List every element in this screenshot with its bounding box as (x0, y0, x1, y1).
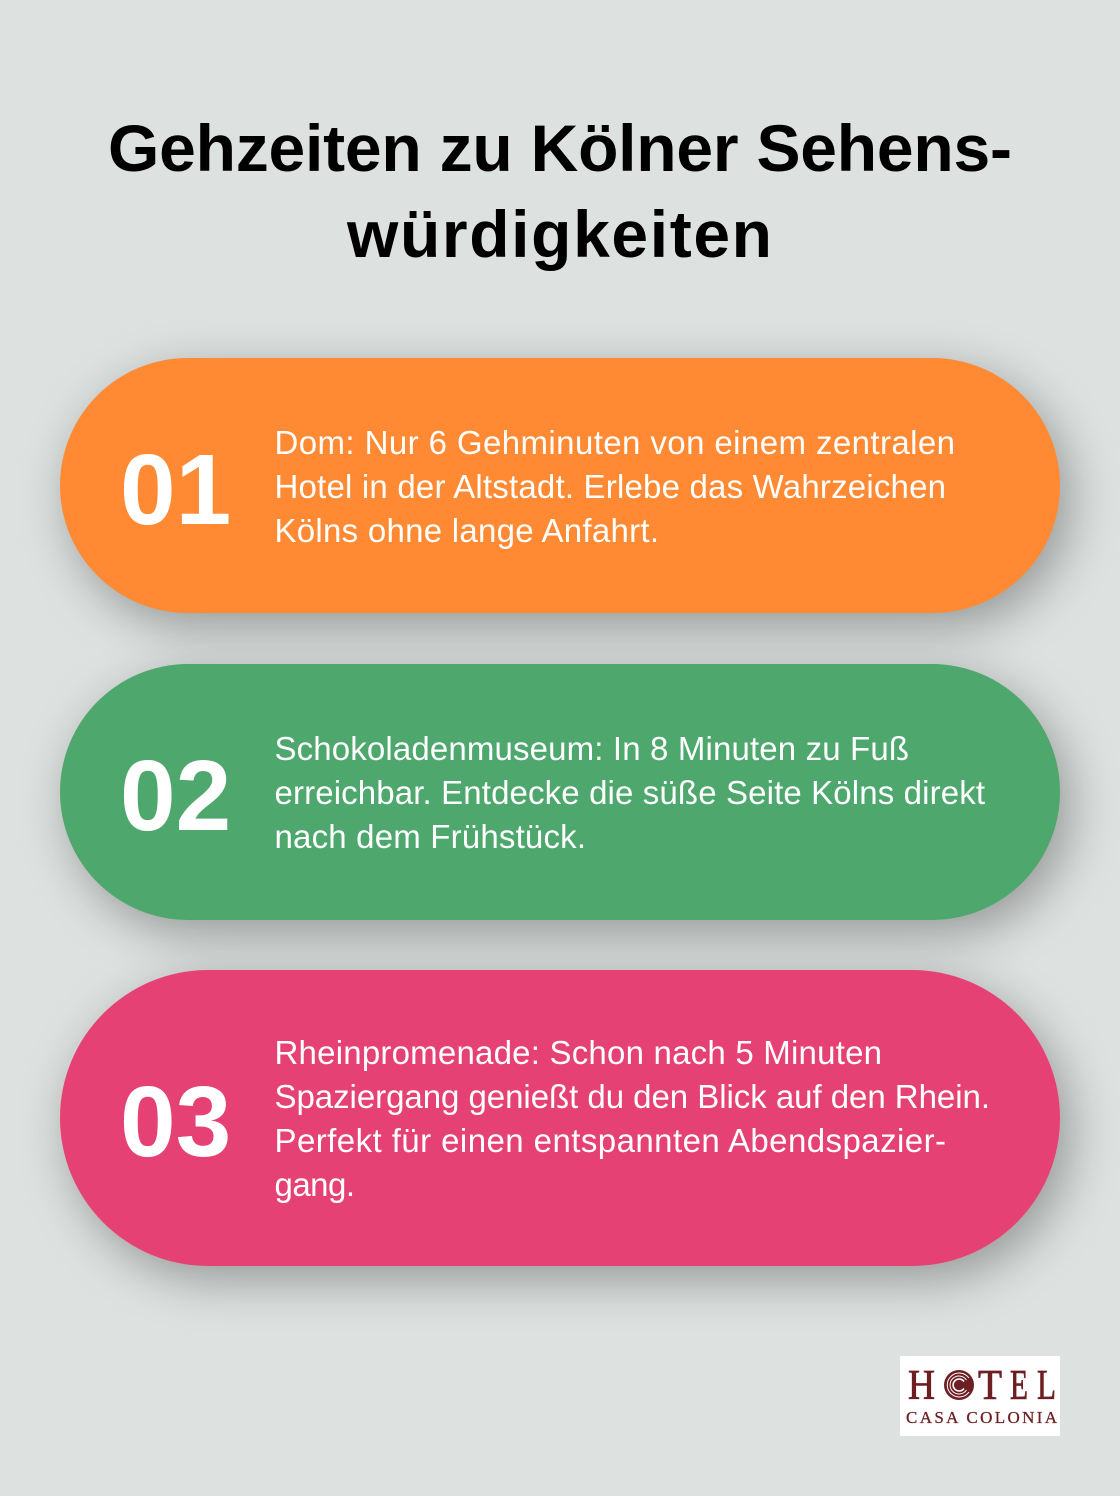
logo wordmark HOTEL: H (908, 1363, 935, 1409)
title (108, 111, 1012, 271)
text block: Schokoladenmuseum: nach dem Frühstück. (274, 818, 586, 855)
number 01: 01 (120, 434, 231, 546)
text block: Dom: Dom: Nur 6 Gehminuten von einem zentralen (274, 424, 955, 461)
title: würdigkeiten (346, 197, 772, 271)
logo wordmark HOTEL: E (1010, 1363, 1028, 1409)
logo subtitle CASA COLONIA: CASA COLONIA (906, 1408, 1058, 1427)
orange pill background (60, 358, 1060, 613)
text block: Rheinpromenade: Perfekt für einen entspannten Abendspazier- (274, 1122, 946, 1159)
pink pill background (60, 970, 1060, 1266)
number 02: 02 (120, 740, 231, 852)
text block: Dom (274, 424, 955, 549)
logo wordmark HOTEL: T (978, 1363, 1002, 1409)
logo wordmark HOTEL: L (1037, 1363, 1056, 1409)
panel: step 02 Schokoladenmuseum (60, 664, 1060, 920)
number 03: 03 (120, 1066, 231, 1178)
logo: Hotel Casa Colonia (900, 1356, 1060, 1436)
text block: Schokoladenmuseum: Schokoladenmuseum: In 8 Minuten zu Fuß (274, 730, 909, 767)
logo white background (900, 1356, 1060, 1436)
icon: spiral O (944, 1370, 974, 1400)
text block: Rheinpromenade: Rheinpromenade: Schon nach 5 Minuten (274, 1034, 882, 1071)
green pill background (60, 664, 1060, 920)
text block: Rheinpromenade: gang. (274, 1166, 355, 1203)
title: Gehzeiten zu Kölner Sehens- (108, 111, 1012, 185)
text block: Schokoladenmuseum: erreichbar. Entdecke die süße Seite Kölns direkt (274, 774, 985, 811)
text block: Rheinpromenade (274, 1034, 990, 1203)
panel: step 01 Dom (60, 358, 1060, 613)
logo wordmark HOTEL (908, 1363, 1056, 1409)
panel: step 03 Rheinpromenade (60, 970, 1060, 1266)
text block: Dom: Hotel in der Altstadt. Erlebe das Wahrzeichen (274, 468, 946, 505)
text block: Schokoladenmuseum (274, 730, 985, 855)
text block: Dom: Kölns ohne lange Anfahrt. (274, 512, 659, 549)
text block: Rheinpromenade: Spaziergang genießt du den Blick auf den Rhein. (274, 1078, 990, 1115)
